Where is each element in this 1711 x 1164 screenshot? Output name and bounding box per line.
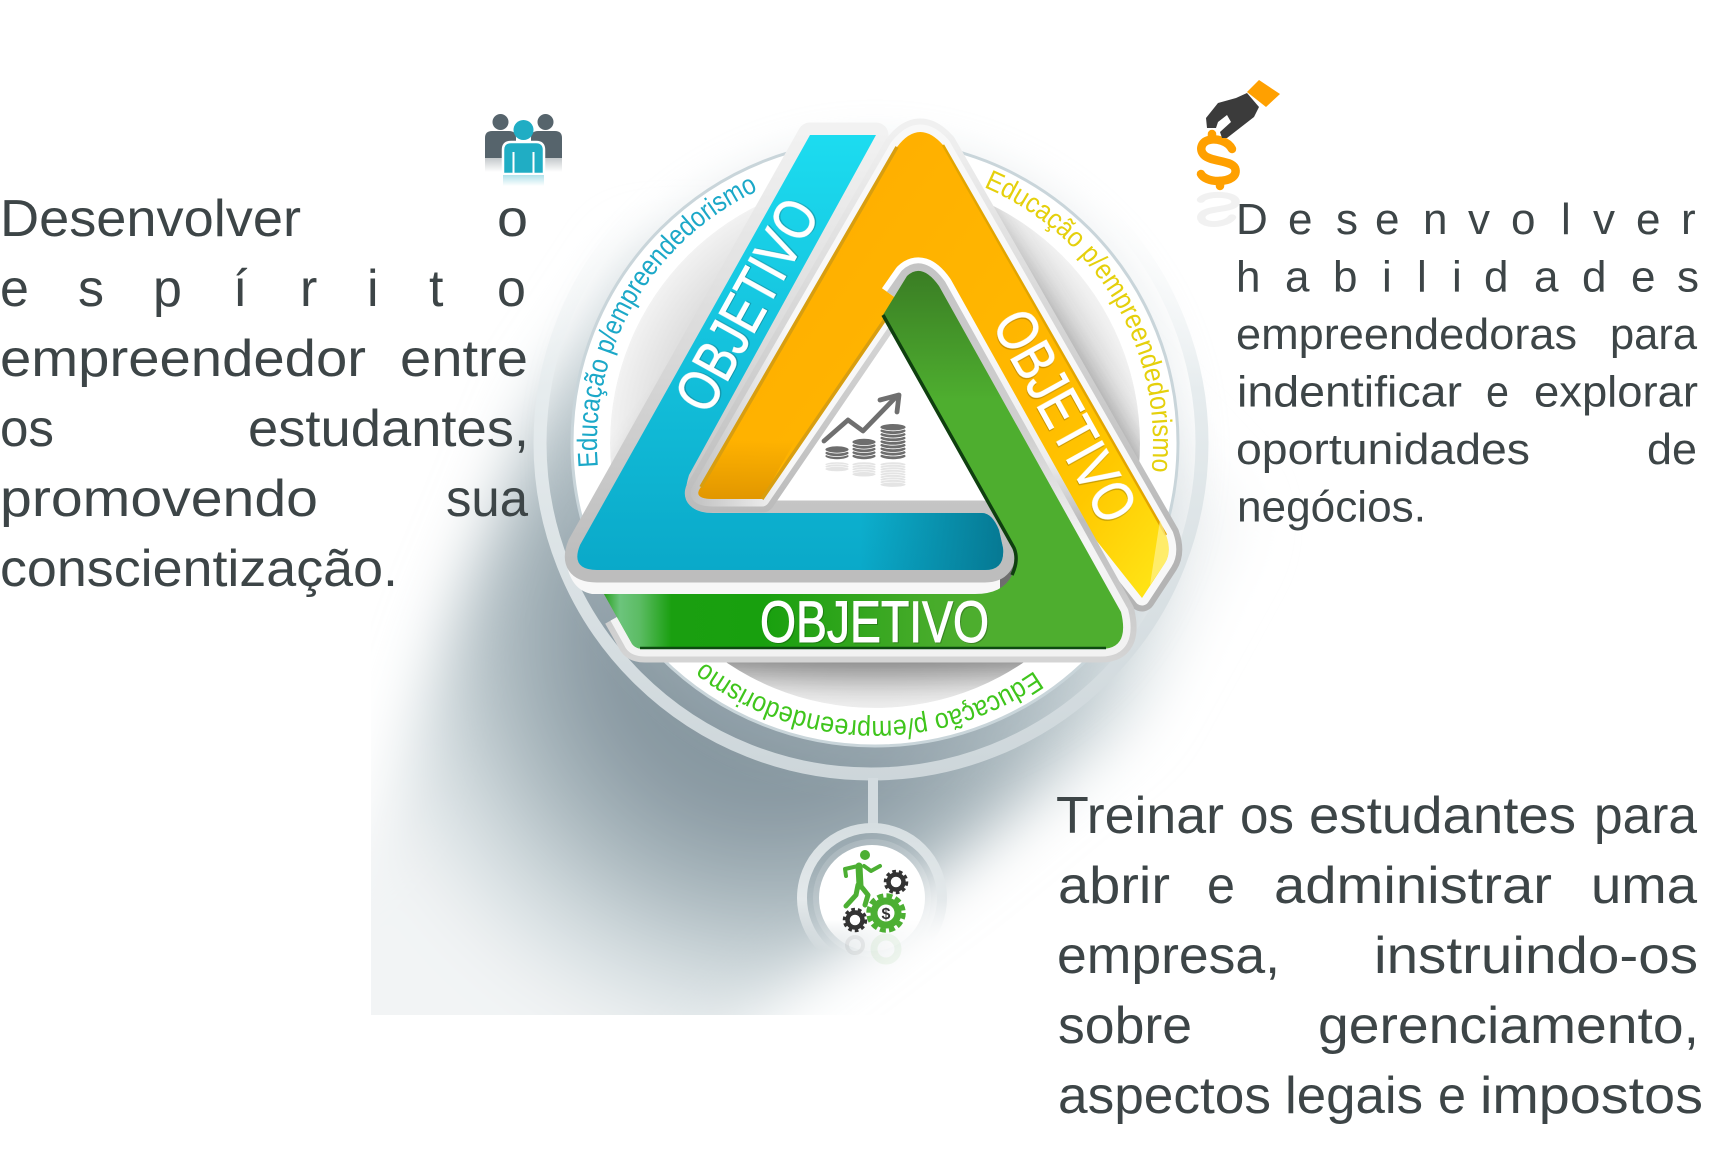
label: green OBJETIVO: OBJETIVO xyxy=(760,590,989,655)
text block: left: empreendedor xyxy=(0,330,366,388)
connector to small circle xyxy=(868,778,878,828)
text block: right: negócios. xyxy=(1237,483,1426,532)
center white triangle xyxy=(770,300,990,505)
band: blue xyxy=(566,135,1003,594)
band: green xyxy=(604,271,1123,655)
text block: right: empreendedoras xyxy=(1236,310,1577,359)
chart icon with coins xyxy=(824,395,906,487)
text block: left: sua xyxy=(446,470,528,528)
icon: green dollar gear: $ xyxy=(882,906,891,923)
text block: right: e xyxy=(1486,368,1509,417)
text block: left: conscientização. xyxy=(0,540,398,598)
label: orange OBJETIVO: OBJETIVO xyxy=(980,299,1149,533)
highlight on yellow tip xyxy=(1150,520,1169,585)
background cast shadow xyxy=(371,247,1218,1015)
small circle with runner icon xyxy=(802,828,942,968)
text block: right: de xyxy=(1647,425,1697,474)
icon: dollar reflection xyxy=(1201,195,1236,224)
curved label: blue: Educação p/empreendedorismo xyxy=(576,179,756,466)
text block: right: explorar xyxy=(1534,368,1698,417)
white ring band xyxy=(572,140,1178,746)
outer ring xyxy=(540,112,1202,774)
text block: bottom: administrar xyxy=(1274,857,1552,915)
text block: bottom: para xyxy=(1594,787,1697,845)
text block: bottom: instruindo-os xyxy=(1374,927,1698,985)
curved label: yellow: Educação p/empreendedorismo xyxy=(986,170,1172,472)
icon: running person xyxy=(845,850,880,906)
text block: left: promovendo xyxy=(0,470,318,528)
icon: coin stacks xyxy=(825,424,906,460)
curved label: green: Educação p/empreendedorismo xyxy=(698,664,1044,740)
icon: hand xyxy=(1206,93,1259,138)
icon: dark gear top xyxy=(886,872,906,892)
text block: bottom: Treinar xyxy=(1056,787,1224,845)
text block: bottom: abrir xyxy=(1058,857,1170,915)
inner disc with triangle shadow xyxy=(610,206,1140,708)
text block: bottom: os xyxy=(1240,787,1294,845)
impossible triangle xyxy=(566,132,1169,655)
text block: right: indentificar xyxy=(1237,368,1462,417)
text block: left: o xyxy=(497,190,528,248)
icon: cuff xyxy=(1247,80,1280,107)
icon: hand with dollar xyxy=(1201,80,1280,224)
text block: bottom: sobre xyxy=(1058,997,1192,1055)
icon: left person xyxy=(485,114,516,172)
text block: bottom: estudantes xyxy=(1309,787,1576,845)
text block: bottom: gerenciamento, xyxy=(1318,997,1699,1055)
text block: bottom xyxy=(1056,787,1703,1125)
text block: right xyxy=(1236,195,1699,532)
text block: bottom: legais xyxy=(1285,1067,1423,1125)
text block: left: espírito xyxy=(0,260,526,318)
label: blue OBJETIVO: OBJETIVO xyxy=(663,188,832,422)
text block: bottom: uma xyxy=(1591,857,1697,915)
text block: bottom: aspectos xyxy=(1058,1067,1271,1125)
icon: rising arrow xyxy=(824,395,899,441)
text block: left: estudantes, xyxy=(248,400,529,458)
text block: bottom: e xyxy=(1438,1067,1466,1125)
band: orange and yellow xyxy=(698,132,1169,598)
icon: people xyxy=(485,114,562,186)
text block: bottom: empresa, xyxy=(1057,927,1280,985)
icon reflection xyxy=(847,937,898,961)
text block: left: os xyxy=(0,400,54,458)
text block: left xyxy=(0,190,529,598)
icon: dollar sign xyxy=(1201,134,1236,186)
icon: center person xyxy=(503,120,544,186)
text block: right: habilidades xyxy=(1236,253,1699,302)
text block: left: Desenvolver xyxy=(0,190,301,248)
coins reflection xyxy=(825,462,906,487)
text block: right: oportunidades xyxy=(1236,425,1530,474)
text block: right: para xyxy=(1610,310,1698,359)
icon: right person xyxy=(531,114,562,172)
text block: bottom: e xyxy=(1207,857,1235,915)
text block: left: entre xyxy=(400,330,528,388)
icon: dark gear bottom xyxy=(844,910,866,930)
text block: bottom: impostos xyxy=(1480,1067,1703,1125)
text block: right: Desenvolver xyxy=(1236,195,1696,244)
soft glow behind circle xyxy=(559,139,1191,771)
